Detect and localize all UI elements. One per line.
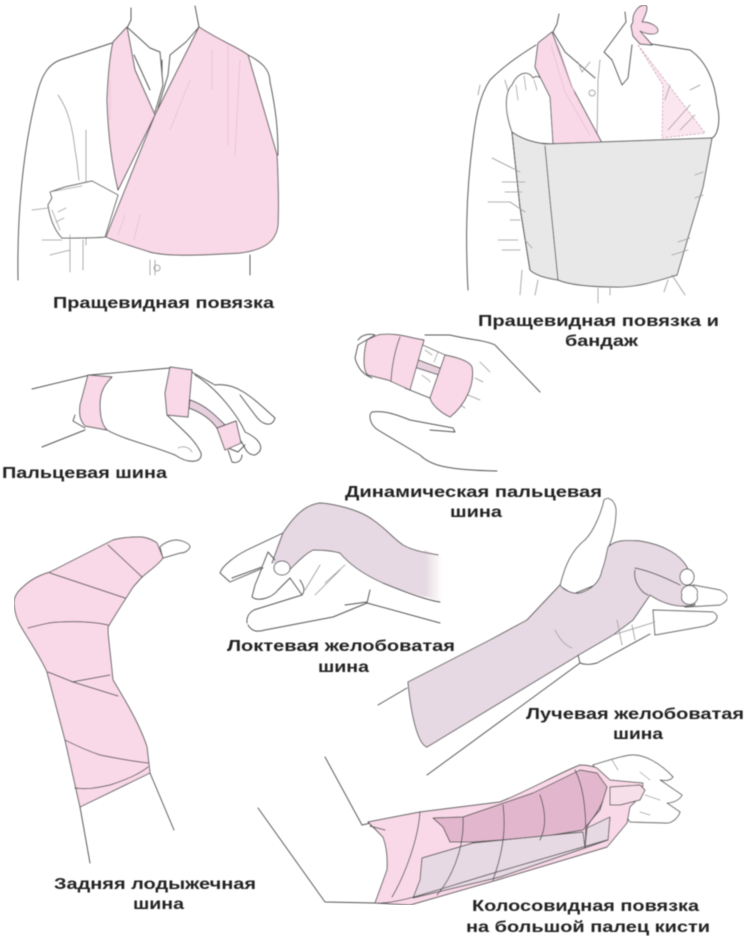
label: radial gutter splint line 2: шина xyxy=(613,726,663,743)
illustration: sling and swathe xyxy=(467,5,719,303)
finger tip xyxy=(228,445,245,463)
label: posterior ankle splint line 2: шина xyxy=(133,896,184,913)
strap: wrist xyxy=(80,375,112,430)
labels xyxy=(2,295,744,936)
label: dynamic finger splint: Динамическая пальцевая xyxy=(345,484,602,501)
label: finger splint: Пальцевая шина xyxy=(2,465,167,482)
label: dynamic finger splint line 2: шина xyxy=(450,504,502,521)
label: sling and swathe: Пращевидная повязка и xyxy=(478,313,719,330)
illustration: thumb spica cast xyxy=(258,755,682,905)
illustration: finger splint xyxy=(32,367,275,463)
label: ulnar gutter splint line 2: шина xyxy=(318,659,369,676)
knot xyxy=(631,5,658,45)
raised fist xyxy=(506,73,553,144)
illustration: radial gutter splint xyxy=(378,498,728,775)
rubber band xyxy=(411,358,445,376)
illustration: posterior ankle splint xyxy=(14,537,190,863)
label: radial gutter splint: Лучевая желобоватая xyxy=(526,706,744,723)
swathe bandage xyxy=(512,132,712,287)
strap: finger xyxy=(217,421,241,450)
label: ulnar gutter splint: Локтевая желобоватая xyxy=(227,638,455,655)
bands xyxy=(364,334,424,390)
label: thumb spica: Колосовидная повязка xyxy=(472,898,699,915)
illustration: ulnar gutter splint xyxy=(220,503,442,631)
label: thumb spica line 2: на большой палец кисти xyxy=(466,919,710,936)
illustration: arm sling xyxy=(18,6,278,280)
left strap xyxy=(535,32,602,144)
label: arm sling: Пращевидная повязка xyxy=(53,295,274,312)
illustration: dynamic finger splint xyxy=(355,334,540,471)
strap: knuckle xyxy=(165,367,192,417)
hand xyxy=(48,181,118,238)
splint bar xyxy=(189,400,225,428)
label: posterior ankle splint: Задняя лодыжечная xyxy=(54,876,256,893)
light strap xyxy=(638,45,705,138)
sling back strap xyxy=(107,27,155,190)
label: sling and swathe line 2: бандаж xyxy=(565,333,639,350)
sling front panel xyxy=(106,27,278,255)
middle white xyxy=(405,343,445,398)
